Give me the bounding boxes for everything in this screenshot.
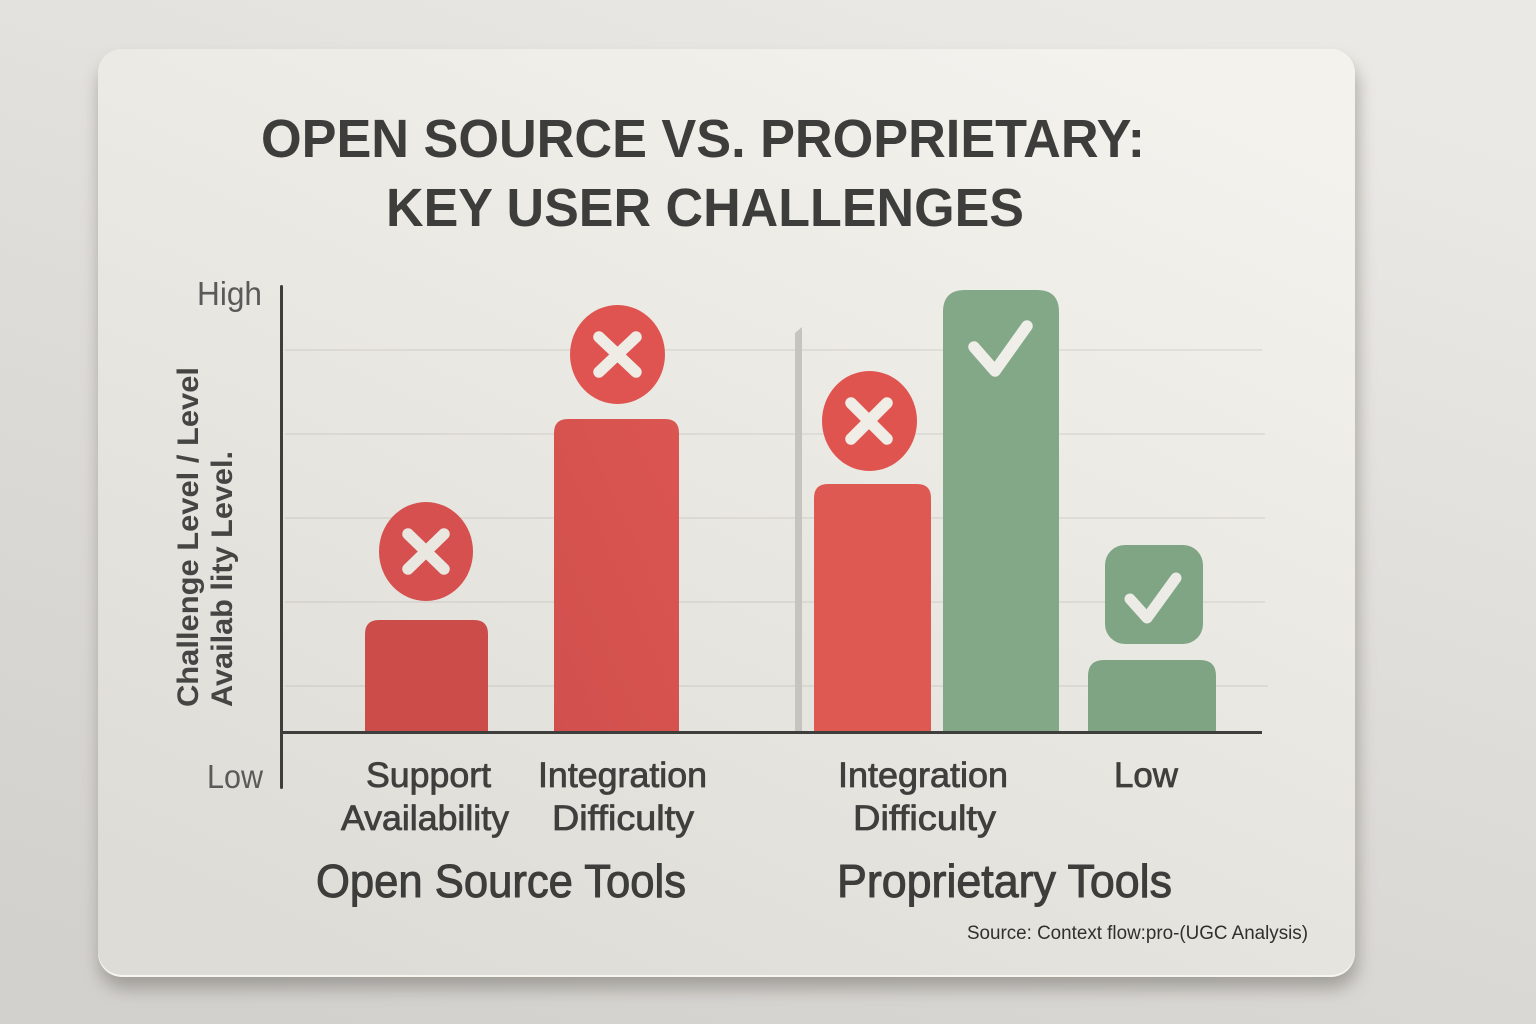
y-axis labels [197, 275, 263, 795]
bar: open source support availability [365, 620, 488, 731]
y-axis title: Challenge Level / Level [172, 367, 205, 707]
category labels: Availability [341, 799, 510, 838]
card shadow [100, 62, 1357, 988]
category labels: Integration [838, 756, 1008, 795]
panel: chart card [98, 49, 1355, 977]
y-axis title [172, 367, 239, 707]
bar: proprietary low green [1088, 660, 1216, 731]
divider between groups [795, 327, 802, 731]
category labels: Difficulty [552, 799, 695, 838]
bar: proprietary integration difficulty [814, 484, 931, 731]
y-axis labels: High [197, 275, 262, 312]
x axis [281, 731, 1262, 734]
bar: proprietary tall green with check [943, 290, 1059, 731]
title [261, 109, 1145, 238]
group labels: Proprietary Tools [837, 855, 1172, 907]
icon: x badge proprietary integration [822, 371, 917, 471]
source note: Source: Context flow:pro-(UGC Analysis) [967, 922, 1308, 944]
y-axis labels: Low [207, 758, 263, 795]
y-axis title: Availab lity Level. [206, 451, 239, 707]
category labels: Integration [538, 756, 707, 795]
category labels: Support [366, 756, 491, 795]
group labels: Open Source Tools [316, 855, 686, 907]
category labels: Difficulty [853, 799, 997, 838]
y axis [280, 285, 283, 789]
category labels [341, 756, 1179, 838]
icon: x badge integration [570, 305, 665, 404]
bar: open source integration difficulty [554, 419, 679, 731]
icon: check badge low [1105, 545, 1203, 644]
group labels [316, 855, 1172, 907]
category labels: Low [1114, 756, 1179, 795]
title: OPEN SOURCE VS. PROPRIETARY: [261, 109, 1145, 169]
icon: x badge support [379, 502, 473, 601]
title: KEY USER CHALLENGES [386, 178, 1024, 238]
